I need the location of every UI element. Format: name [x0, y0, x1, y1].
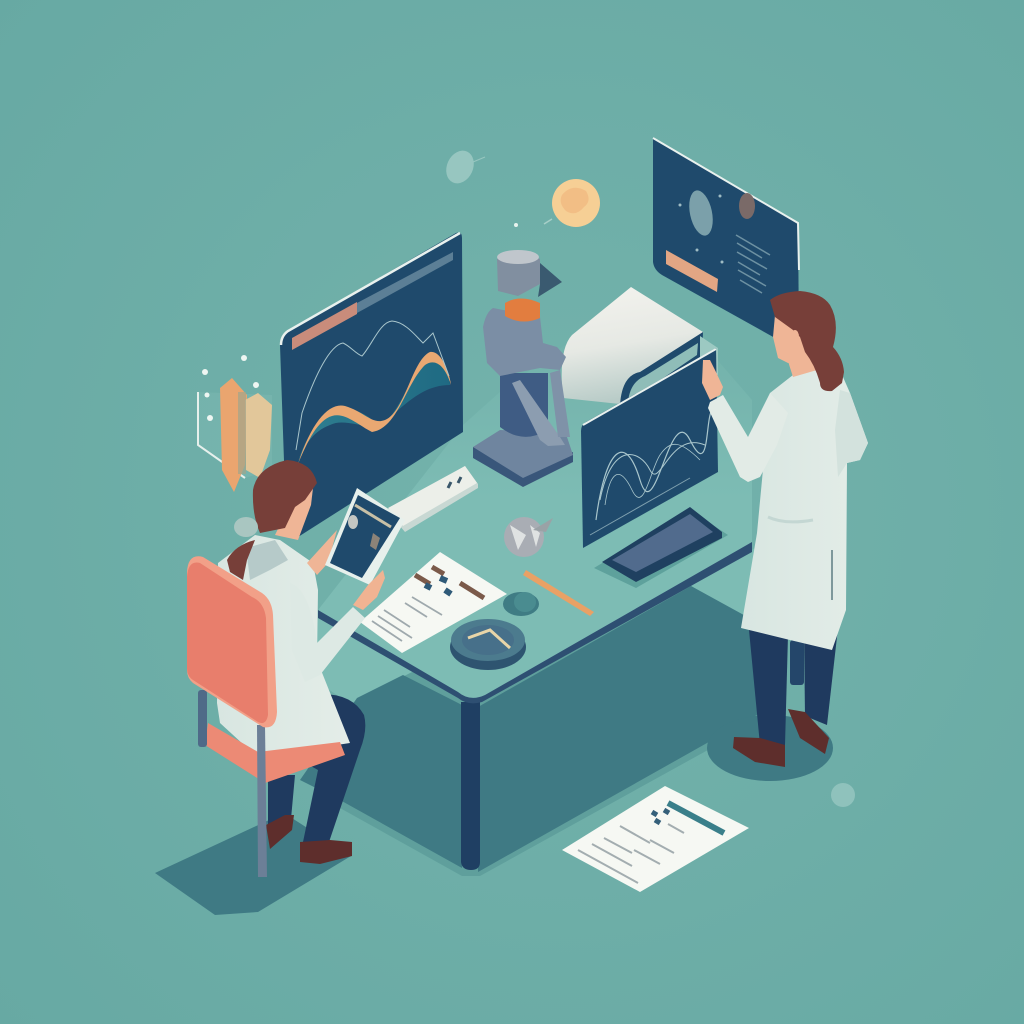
chair back — [187, 556, 277, 727]
left shoe — [733, 737, 785, 767]
floating orb pale — [441, 146, 485, 188]
robot base — [473, 447, 573, 487]
neck — [786, 350, 817, 377]
near leg — [300, 694, 365, 845]
coat sleeve shade — [835, 390, 868, 477]
chair front leg — [257, 725, 267, 877]
chair seat — [205, 723, 345, 783]
tablet on desk — [594, 507, 728, 588]
light floor under desk right — [691, 548, 760, 628]
left leg — [749, 630, 788, 745]
robot neck orange — [505, 298, 540, 322]
hand-held tablet — [325, 488, 405, 585]
seated scientist — [187, 460, 405, 877]
printer machine — [562, 287, 718, 405]
round bowl — [450, 619, 526, 670]
far leg — [268, 775, 295, 832]
pocket — [768, 517, 813, 522]
face — [773, 315, 812, 363]
wave ribbon chart — [298, 352, 451, 464]
pointing arm sleeve — [708, 393, 788, 482]
ponytail — [227, 540, 255, 580]
coat sleeve and arm — [290, 583, 365, 682]
front hand — [353, 570, 385, 610]
far desk leg — [790, 640, 804, 685]
seated scientist shadow — [155, 813, 351, 915]
hair — [770, 291, 844, 391]
robot figure — [473, 250, 573, 487]
middle right monitor — [581, 348, 718, 548]
far shoe — [266, 815, 294, 849]
robot pedestal — [500, 373, 548, 437]
standing scientist — [702, 291, 868, 767]
front desk leg — [461, 702, 480, 870]
robot forearm left — [512, 380, 565, 446]
ear — [791, 330, 799, 344]
back arm hand — [307, 530, 337, 575]
top right monitor — [653, 138, 799, 340]
keyboard device — [388, 466, 478, 532]
chair back face — [187, 563, 268, 723]
face and neck — [275, 488, 313, 540]
glass chart with bars — [198, 355, 272, 492]
lab coat — [741, 370, 868, 650]
robot head — [497, 252, 540, 296]
grey sphere sample — [504, 517, 553, 557]
coat vent — [831, 550, 833, 600]
right leg — [804, 628, 838, 725]
desk underside right panel — [478, 586, 762, 872]
floating planet orange — [514, 179, 600, 227]
hand — [702, 360, 723, 400]
chair back leg — [198, 690, 207, 747]
light floor under desk left — [300, 600, 412, 704]
hair — [253, 460, 317, 533]
coat body — [217, 535, 350, 757]
floating dot right — [831, 783, 855, 807]
right shoe — [788, 709, 829, 754]
monitor header bar — [292, 252, 453, 350]
paper on desk — [360, 552, 507, 653]
near shoe — [300, 840, 352, 864]
robot forearm right — [550, 370, 570, 437]
desk top — [318, 340, 752, 703]
robot visor — [538, 263, 562, 297]
floor shadow under desk — [340, 584, 760, 876]
small desk dish — [503, 592, 539, 616]
collar shade — [246, 540, 288, 580]
hair tie — [234, 517, 258, 537]
thin line plot — [296, 321, 449, 450]
left monitor with wave chart — [280, 233, 463, 537]
desk underside left panel — [300, 675, 462, 868]
paper on floor — [562, 786, 749, 892]
standing scientist shadow — [707, 715, 833, 781]
pencil — [523, 570, 594, 616]
robot torso — [483, 308, 566, 376]
